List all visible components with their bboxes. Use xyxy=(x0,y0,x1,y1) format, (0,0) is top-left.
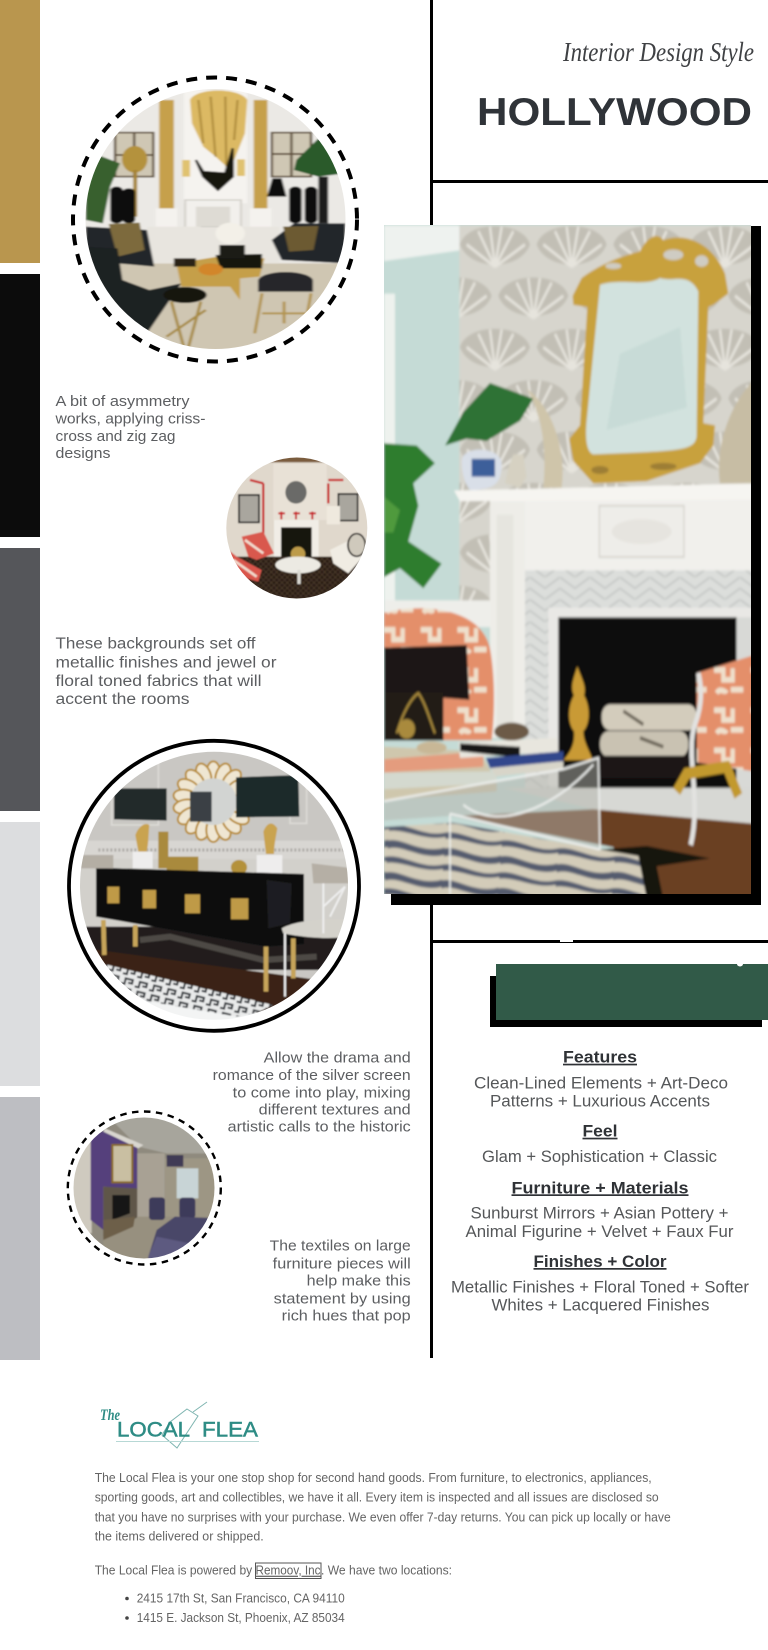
text: asymmetry: A bit of asymmetry xyxy=(56,394,190,410)
text: backgrounds: These backgrounds set off xyxy=(56,636,256,653)
dashed ring xyxy=(73,78,357,362)
glass table xyxy=(384,758,600,849)
text: textiles: statement by using xyxy=(274,1291,411,1307)
feel: Feel xyxy=(582,1122,618,1141)
locations list: 2415 17th St, San Francisco, CA 94110 xyxy=(137,1592,345,1606)
mantel xyxy=(524,498,751,572)
green banner with black shadow xyxy=(490,962,768,1027)
lamps xyxy=(114,788,167,821)
logo: The Local Flea: FLEA xyxy=(202,1419,258,1442)
swatch: charcoal xyxy=(0,548,40,811)
about paragraph: the items delivered or shipped. xyxy=(95,1530,264,1544)
logo: The Local Flea xyxy=(100,1402,259,1448)
finishes and colour: Whites + Lacquered Finishes xyxy=(492,1297,710,1315)
logo wordmark: LOCAL xyxy=(117,1419,190,1442)
text: backgrounds: floral toned fabrics that will xyxy=(56,673,262,690)
powered by line xyxy=(95,1563,452,1578)
solid ring xyxy=(69,741,359,1031)
text: textiles: rich hues that pop xyxy=(282,1309,411,1325)
text: asymmetry: cross and zig zag xyxy=(56,429,176,445)
text: asymmetry xyxy=(54,394,206,462)
text: backgrounds: metallic finishes and jewel or xyxy=(56,654,276,671)
gold tables xyxy=(176,257,264,300)
about paragraph xyxy=(95,1471,671,1544)
powered by line: . We have two locations: xyxy=(321,1564,452,1578)
text: silver screen: Allow the drama and xyxy=(264,1050,411,1066)
pictures xyxy=(115,133,153,177)
furniture and materials: Sunburst Mirrors + Asian Pottery + xyxy=(470,1204,728,1222)
text: textiles: The textiles on large xyxy=(270,1239,411,1255)
main title: HOLLYWOOD xyxy=(477,91,752,134)
swatch: silver xyxy=(0,1097,40,1360)
feel xyxy=(482,1122,717,1166)
banner shadow xyxy=(490,976,762,1027)
finishes and colour: Finishes + Color xyxy=(534,1252,667,1271)
rug and bottom fade xyxy=(105,964,274,1018)
locations list xyxy=(125,1592,345,1625)
finishes and colour xyxy=(451,1252,750,1315)
text: silver screen: different textures and xyxy=(259,1103,411,1119)
dashed ring xyxy=(68,1112,221,1264)
about paragraph: The Local Flea is your one stop shop for second hand goods. From furniture, to electronics, appliances, xyxy=(95,1471,652,1485)
features: Clean-Lined Elements + Art-Deco xyxy=(474,1074,728,1092)
text: backgrounds: accent the rooms xyxy=(56,691,190,708)
features: Features xyxy=(563,1048,637,1067)
rug xyxy=(384,823,660,899)
books and table xyxy=(384,747,497,800)
right chair xyxy=(697,655,753,771)
furniture and materials: Furniture + Materials xyxy=(512,1178,688,1197)
text: textiles xyxy=(270,1239,411,1325)
swatch: pale grey xyxy=(0,822,40,1086)
floor xyxy=(118,262,338,349)
fireplace xyxy=(184,199,243,226)
text: textiles: furniture pieces will xyxy=(273,1256,411,1272)
features xyxy=(474,1048,728,1111)
side table and pouf xyxy=(167,302,206,347)
logo script: The xyxy=(100,1407,120,1424)
circle photo: purple bedroom xyxy=(67,1112,221,1265)
circle photo: black console and sunburst mirror xyxy=(69,741,359,1031)
about paragraph: that you have no surprises with your purchase. We even offer 7-day returns. You can pick up locally or have xyxy=(95,1510,671,1524)
text: backgrounds xyxy=(56,636,276,708)
photo xyxy=(74,1118,214,1258)
fireplace room photo xyxy=(380,220,755,899)
furniture and materials: Animal Figurine + Velvet + Faux Fur xyxy=(466,1223,734,1241)
powered by line: The Local Flea is powered by xyxy=(95,1564,253,1578)
text: textiles: help make this xyxy=(307,1274,411,1290)
about paragraph: sporting goods, art and collectibles, we have it all. Every item is inspected and all issues are disclosed so xyxy=(95,1491,659,1505)
logs and finial xyxy=(602,704,697,730)
floor and console xyxy=(73,927,357,970)
locations list: 1415 E. Jackson St, Phoenix, AZ 85034 xyxy=(137,1611,345,1625)
furniture and materials xyxy=(466,1178,734,1241)
photo xyxy=(78,83,353,357)
plants and urns xyxy=(86,155,120,223)
mirror xyxy=(569,236,728,483)
title block xyxy=(477,37,754,134)
features: Patterns + Luxurious Accents xyxy=(490,1093,710,1111)
circle photo: red and white parlour xyxy=(223,455,370,603)
chairs xyxy=(78,855,113,868)
sofas xyxy=(86,227,154,267)
swatch: black xyxy=(0,274,40,537)
powered by line: Remoov, Inc xyxy=(256,1564,320,1578)
colour swatch strip xyxy=(0,0,40,1360)
circle photo: gold and black living room xyxy=(73,78,357,362)
banner xyxy=(496,964,768,1020)
fig tree xyxy=(384,443,442,588)
link box xyxy=(256,1563,321,1578)
feel: Glam + Sophistication + Classic xyxy=(482,1148,717,1166)
text: silver screen: artistic calls to the historic xyxy=(228,1120,411,1136)
mantel objects xyxy=(527,389,563,488)
text: silver screen: to come into play, mixing xyxy=(233,1085,411,1101)
text: silver screen xyxy=(213,1050,411,1136)
price tag outline xyxy=(162,1402,207,1448)
main photo with black offset shadow xyxy=(380,220,761,905)
photo shadow xyxy=(391,226,761,905)
finishes and colour: Metallic Finishes + Floral Toned + Softer xyxy=(451,1278,750,1296)
text: silver screen: romance of the silver screen xyxy=(213,1068,411,1084)
sunburst xyxy=(172,761,254,842)
left chair xyxy=(384,608,494,740)
text: asymmetry: works, applying criss- xyxy=(54,412,206,428)
swatch: gold xyxy=(0,0,40,263)
photo xyxy=(80,752,348,1020)
text: asymmetry: designs xyxy=(56,446,110,462)
style details list xyxy=(451,1048,750,1315)
